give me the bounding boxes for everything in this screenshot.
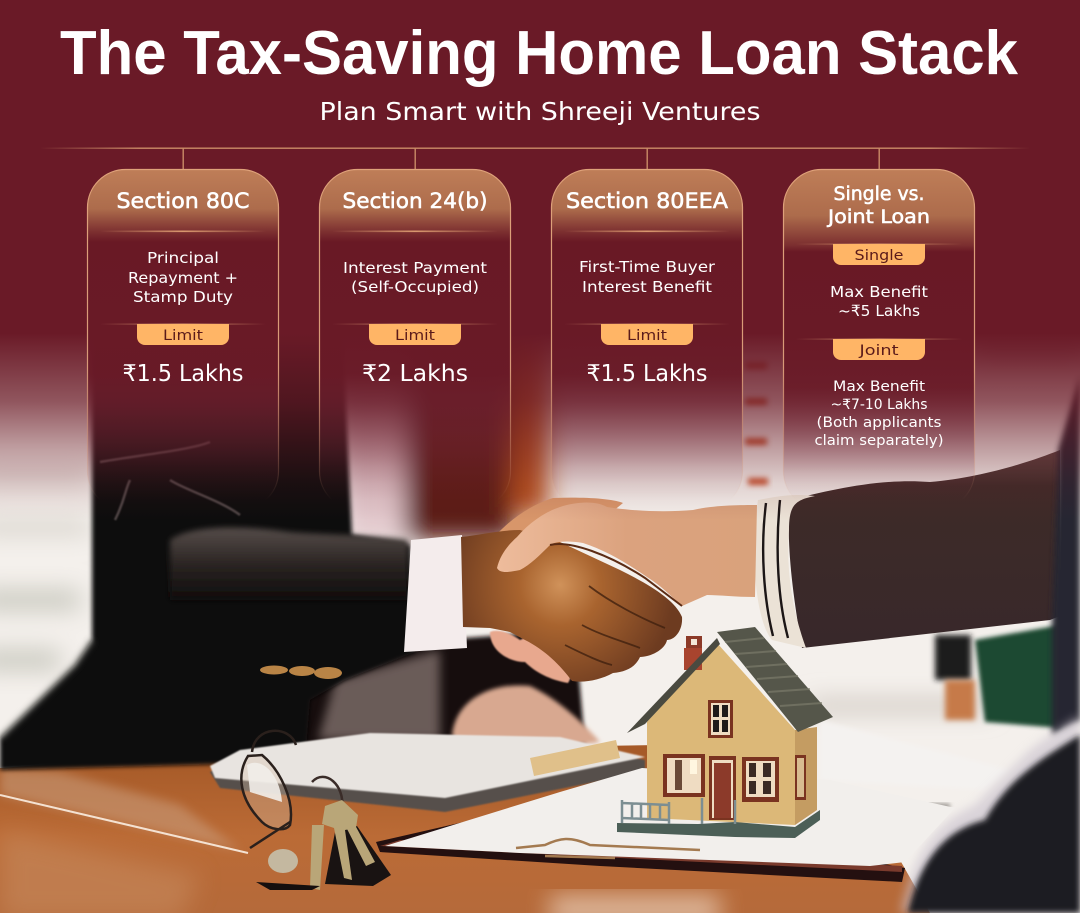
desk reflection xyxy=(550,895,720,913)
right window xyxy=(742,757,779,802)
description: (Self-Occupied) xyxy=(351,278,479,296)
notebook xyxy=(210,733,645,812)
joint benefit xyxy=(814,379,944,449)
single benefit xyxy=(830,283,928,320)
grip shadow xyxy=(550,544,682,606)
description xyxy=(128,249,238,306)
porch railing xyxy=(622,798,735,824)
limit value: ₹1.5 Lakhs xyxy=(122,361,244,387)
single benefit: ~₹5 Lakhs xyxy=(838,302,920,320)
bright office backdrop xyxy=(0,300,1080,913)
limit tag xyxy=(601,324,693,345)
pen xyxy=(530,740,620,776)
limit divider xyxy=(564,324,730,325)
joint benefit: Max Benefit xyxy=(833,379,926,395)
red folder xyxy=(376,800,905,882)
single divider xyxy=(796,244,962,245)
right side paper stack xyxy=(820,720,1010,806)
dark post xyxy=(935,635,971,680)
left window xyxy=(663,754,705,797)
heading: Section 80C xyxy=(116,189,250,213)
key ring xyxy=(312,777,342,808)
key coin xyxy=(268,849,298,873)
desk lower glare xyxy=(0,830,200,913)
limit tag: Limit xyxy=(395,328,436,344)
limit value: ₹2 Lakhs xyxy=(362,361,468,387)
joint benefit: claim separately) xyxy=(814,433,944,449)
left fist xyxy=(461,530,682,682)
joint benefit: ~₹7-10 Lakhs xyxy=(830,397,928,413)
handshake xyxy=(461,498,757,683)
joint tag xyxy=(833,339,925,360)
key fob xyxy=(325,826,391,886)
limit tag xyxy=(369,324,461,345)
documents xyxy=(385,768,955,866)
finger creases xyxy=(565,586,665,665)
roof xyxy=(627,627,833,733)
side window xyxy=(795,755,806,800)
limit tag: Limit xyxy=(627,328,668,344)
panel: Section 80EEA xyxy=(552,170,742,510)
joint tag: Joint xyxy=(858,343,899,359)
wooden desk xyxy=(0,745,930,913)
front wall xyxy=(647,643,795,825)
lower hand xyxy=(452,685,600,748)
gold cuff buttons xyxy=(260,666,342,679)
joint divider xyxy=(796,338,962,340)
glasses xyxy=(241,731,296,848)
orange blinds blotches xyxy=(745,322,768,485)
background photo scene xyxy=(0,300,1080,913)
orange post xyxy=(945,680,975,720)
model house xyxy=(617,627,833,838)
heading: Section 80EEA xyxy=(566,189,729,213)
description: Interest Benefit xyxy=(582,278,712,296)
single tag: Single xyxy=(854,248,904,264)
left shirt cuff xyxy=(404,535,467,652)
right shirt cuff xyxy=(754,495,815,648)
right foreground person blur xyxy=(900,715,1080,913)
keys xyxy=(256,777,391,890)
upper window xyxy=(708,700,733,738)
description: First-Time Buyer xyxy=(579,258,716,276)
far hand thumb xyxy=(497,498,623,540)
desk top glare xyxy=(0,768,240,850)
panel: Section 24(b) xyxy=(320,170,510,510)
folder rim xyxy=(380,840,902,872)
limit value: ₹1.5 Lakhs xyxy=(586,361,708,387)
heading: Single vs. xyxy=(834,184,924,205)
single tag xyxy=(833,244,925,265)
side wall xyxy=(795,727,817,825)
header divider xyxy=(100,230,266,232)
shirt reflection xyxy=(318,650,440,740)
limit divider xyxy=(332,324,498,325)
subtitle: Plan Smart with Shreeji Ventures xyxy=(320,97,760,126)
blurred office details xyxy=(0,300,1080,712)
right dark figure edge xyxy=(1052,375,1080,735)
desk edge highlight xyxy=(0,795,248,853)
right person sleeve xyxy=(789,450,1060,648)
lens reflection xyxy=(247,763,282,802)
description: Repayment + xyxy=(128,269,238,287)
limit tag xyxy=(137,324,229,345)
header divider xyxy=(332,230,498,232)
limit divider xyxy=(100,324,266,325)
description: Interest Payment xyxy=(343,259,487,277)
paper clip xyxy=(516,839,700,858)
dark lower torso area xyxy=(300,630,585,760)
left person suit xyxy=(0,320,415,770)
connector lines xyxy=(40,148,1030,169)
right hand xyxy=(497,502,757,606)
gold keys xyxy=(310,800,375,890)
heading: Joint Loan xyxy=(827,207,930,228)
key shadow xyxy=(256,882,320,890)
heading: Section 24(b) xyxy=(342,189,488,213)
description xyxy=(579,258,716,296)
limit tag: Limit xyxy=(163,328,204,344)
description: Stamp Duty xyxy=(133,288,233,306)
front door xyxy=(709,756,736,820)
panel: Single vs. Joint Loan xyxy=(784,170,974,510)
description xyxy=(343,259,487,296)
base xyxy=(617,810,820,838)
single benefit: Max Benefit xyxy=(830,283,928,301)
panel: Section 80C xyxy=(88,170,278,510)
heading xyxy=(827,184,930,228)
description: Principal xyxy=(147,249,219,267)
header divider xyxy=(564,230,730,232)
lower fingers xyxy=(490,631,571,683)
joint benefit: (Both applicants xyxy=(816,415,942,431)
title: The Tax-Saving Home Loan Stack xyxy=(60,19,1018,88)
green plant blur xyxy=(975,625,1060,728)
chimney xyxy=(684,636,702,670)
